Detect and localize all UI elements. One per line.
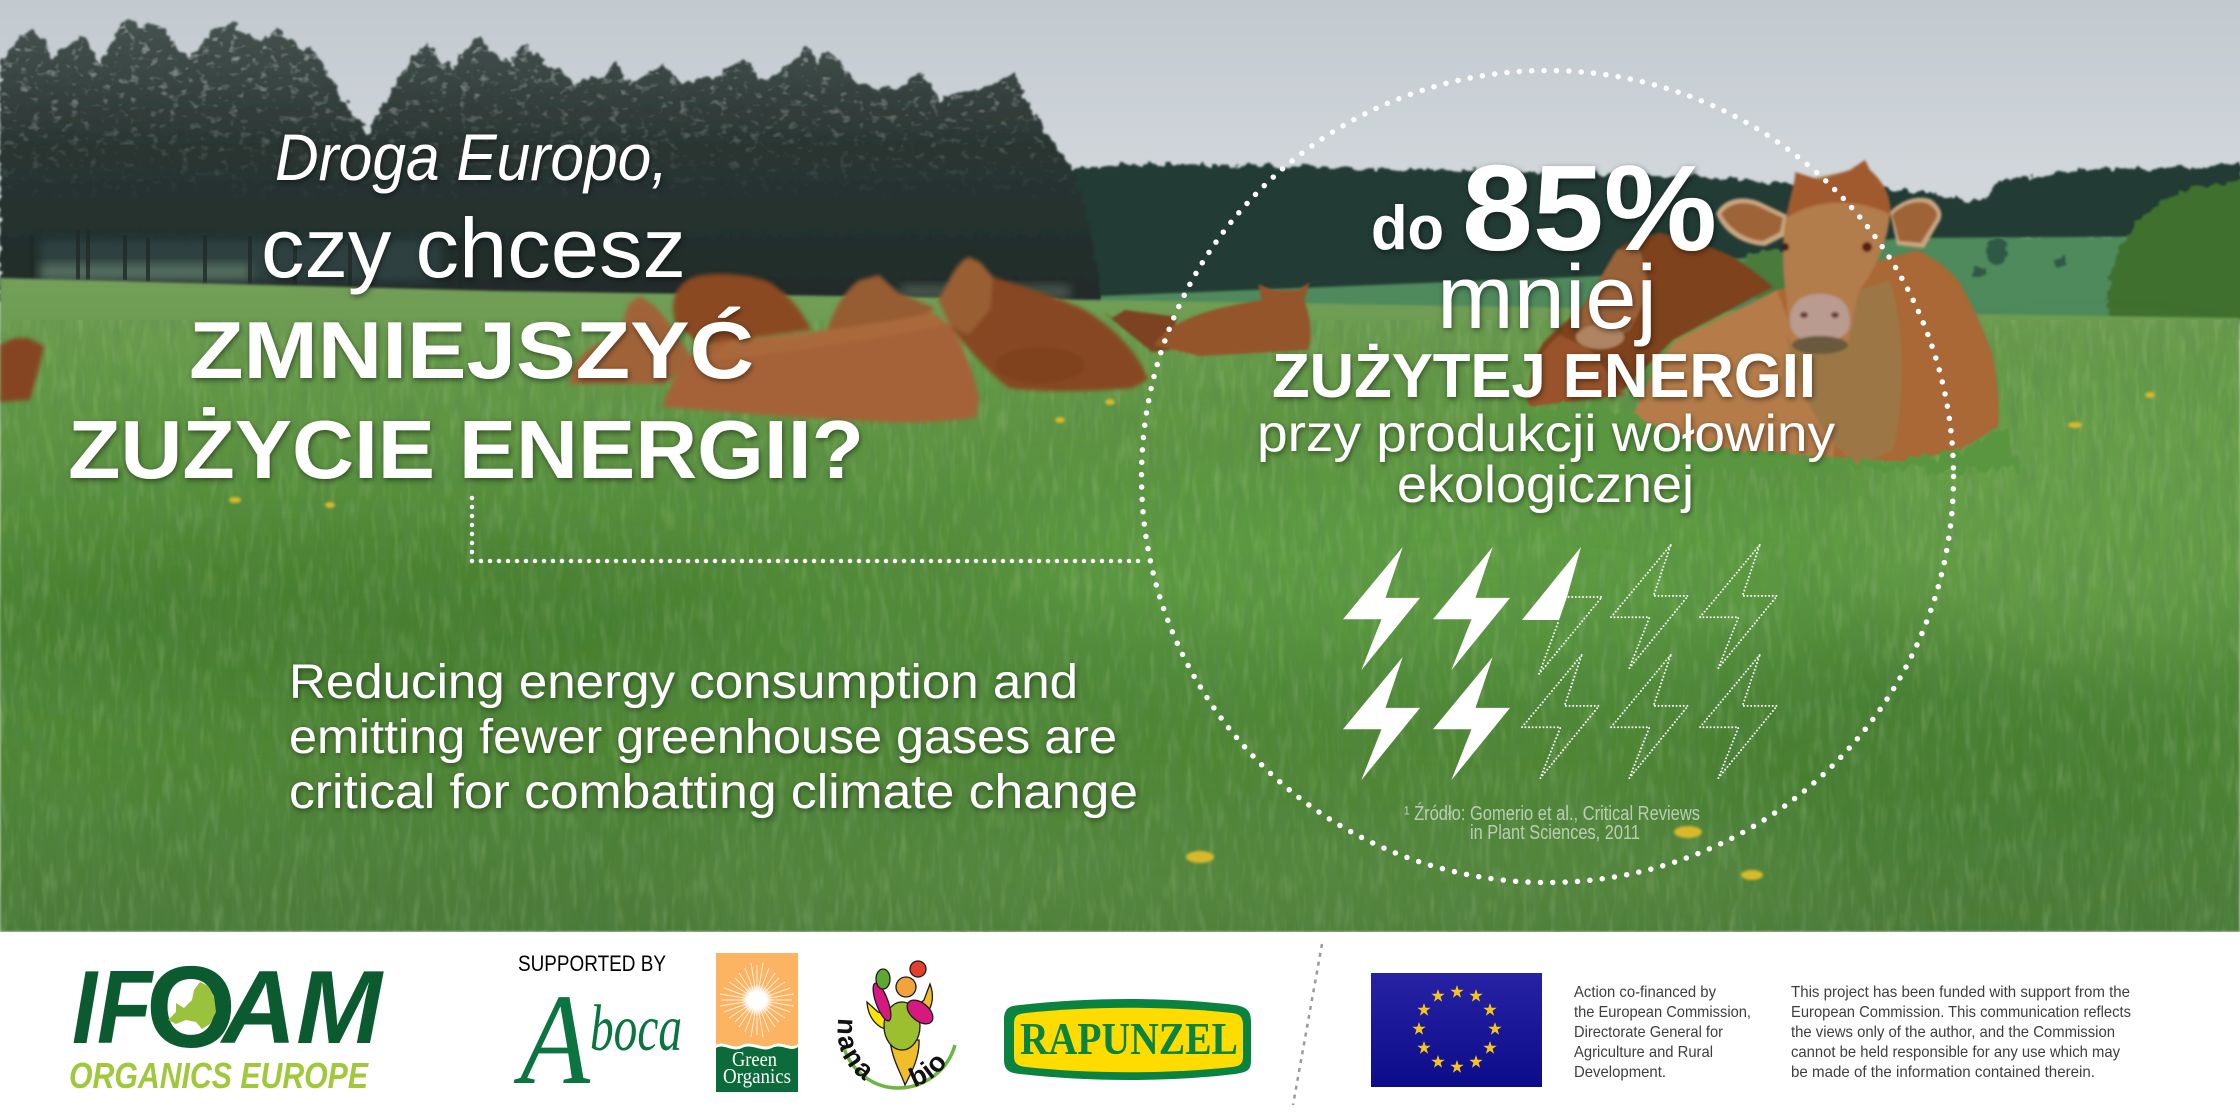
co-financing statement: the European Commission, — [1574, 1004, 1751, 1021]
far green field on the right — [1100, 236, 2240, 325]
emphasis line one: ZMNIEJSZYĆ — [189, 305, 754, 396]
organic: ekologicznej — [1397, 456, 1694, 514]
disclaimer: be made of the information contained therein. — [1791, 1064, 2095, 1081]
second cow behind main cow — [1527, 233, 1773, 407]
logo: IFOAM Organics Europe: IF — [72, 950, 154, 1066]
logo: Green Organics — [716, 951, 798, 1092]
dandelions — [229, 392, 2155, 880]
grass rim — [843, 1045, 955, 1088]
europe map in the O — [168, 982, 216, 1029]
emphasis line two: ZUŻYCIE ENERGII? — [68, 403, 864, 496]
greeting line: Droga Europo, — [275, 120, 668, 194]
meadow — [0, 278, 2240, 932]
headline question — [68, 120, 864, 496]
small lying cow — [1154, 282, 1311, 356]
co-financing statement: Agriculture and Rural — [1574, 1044, 1713, 1061]
disclaimer: cannot be held responsible for any use which may — [1791, 1044, 2120, 1061]
bushes on the far field — [1736, 180, 2240, 322]
small cow far right of group — [1103, 310, 1177, 352]
main cow head — [1783, 168, 1890, 345]
main cow body — [1633, 250, 1999, 462]
sunburst — [720, 963, 794, 1037]
dotted divider — [1293, 944, 1322, 1105]
magenta fruit — [870, 981, 894, 1023]
body — [884, 1002, 920, 1050]
logo: nana bio: nana — [837, 1020, 870, 1081]
disclaimer: European Commission. This communication reflects — [1791, 1004, 2131, 1021]
leg — [890, 1040, 919, 1085]
statistic text block — [1257, 140, 1835, 514]
percentage: 85% — [1462, 140, 1717, 276]
disclaimer — [1791, 984, 2131, 1081]
distant forest — [1060, 163, 2240, 310]
footer band — [0, 932, 2240, 1120]
hunched cow — [673, 274, 811, 345]
sky — [0, 0, 2240, 340]
grass texture — [0, 320, 2240, 932]
energy used: ZUŻYTEJ ENERGII — [1272, 342, 1816, 411]
logo: Green Organics: Organics — [723, 1064, 791, 1088]
logo: IFOAM Organics Europe: O — [146, 942, 236, 1072]
cow with head turned — [826, 275, 935, 334]
logo: Aboca: boca — [590, 992, 682, 1065]
dotted connector from headline to circle — [472, 498, 1145, 561]
cows, left group — [0, 257, 1148, 422]
supported by label: SUPPORTED BY — [518, 951, 666, 976]
source note: in Plant Sciences, 2011 — [1470, 822, 1640, 844]
main cow forequarter — [1633, 290, 1840, 457]
logo: Rapunzel — [1004, 999, 1251, 1080]
source note: ¹ Źródło: Gomerio et al., Critical Reviews — [1404, 802, 1700, 825]
tree trunks — [32, 230, 460, 295]
EU flag — [1371, 973, 1542, 1087]
logo: Green Organics: Green — [732, 1047, 777, 1071]
disclaimer: This project has been funded with support from the — [1791, 984, 2130, 1001]
tall grass over cow — [1520, 405, 2020, 470]
logo: Aboca: A — [513, 968, 591, 1112]
main cow chest — [1787, 280, 1902, 465]
logo: Rapunzel: RAPUNZEL — [1020, 1013, 1238, 1064]
cows, centre and right — [1103, 160, 1999, 465]
disclaimer: the views only of the author, and the Commission — [1791, 1024, 2115, 1041]
head — [896, 977, 916, 997]
blue glade behind the trunks — [40, 240, 440, 282]
logo: IFOAM Organics Europe: AM — [219, 950, 384, 1066]
ring of twelve stars — [1412, 985, 1502, 1073]
logo: nana bio: bio — [908, 1056, 945, 1087]
right lying cow — [938, 257, 1148, 391]
logo: IFOAM Organics Europe: ORGANICS EUROPE — [69, 1055, 369, 1096]
prefix: do — [1371, 194, 1444, 263]
big brown lying cow — [662, 312, 979, 422]
green fruit — [876, 969, 890, 989]
cow at left edge — [0, 338, 44, 402]
co-financing statement: Action co-financed by — [1574, 984, 1716, 1001]
body text: critical for combatting climate change — [289, 766, 1138, 819]
body text: Reducing energy consumption and — [289, 656, 1078, 709]
filled bolts — [1343, 547, 1581, 780]
red apple — [910, 961, 926, 977]
dotted circle — [1142, 70, 1954, 882]
logo: IFOAM Organics Europe — [69, 942, 384, 1096]
small cow behind — [569, 296, 695, 384]
body text — [289, 656, 1138, 819]
row of trees — [0, 15, 1100, 300]
co-financing statement — [1574, 984, 1751, 1081]
less: mniej — [1437, 248, 1657, 348]
arms — [867, 1002, 897, 1030]
source note — [1404, 802, 1700, 844]
body text: emitting fewer greenhouse gases are — [289, 711, 1117, 764]
question line: czy chcesz — [261, 201, 686, 295]
co-financing statement: Directorate General for — [1574, 1024, 1724, 1041]
logo: Aboca — [513, 968, 682, 1112]
main cow muzzle, mouth and eyes — [1790, 294, 1850, 342]
logo: nana bio — [837, 960, 957, 1090]
beef production: przy produkcji wołowiny — [1257, 405, 1835, 463]
co-financing statement: Development. — [1574, 1064, 1666, 1081]
meadow light and shade — [0, 390, 2240, 940]
outlined bolts — [1522, 545, 1777, 778]
main cow ears — [1716, 198, 1787, 246]
energy bolts pictogram: 4.5 of 10 filled — [1343, 545, 1777, 780]
